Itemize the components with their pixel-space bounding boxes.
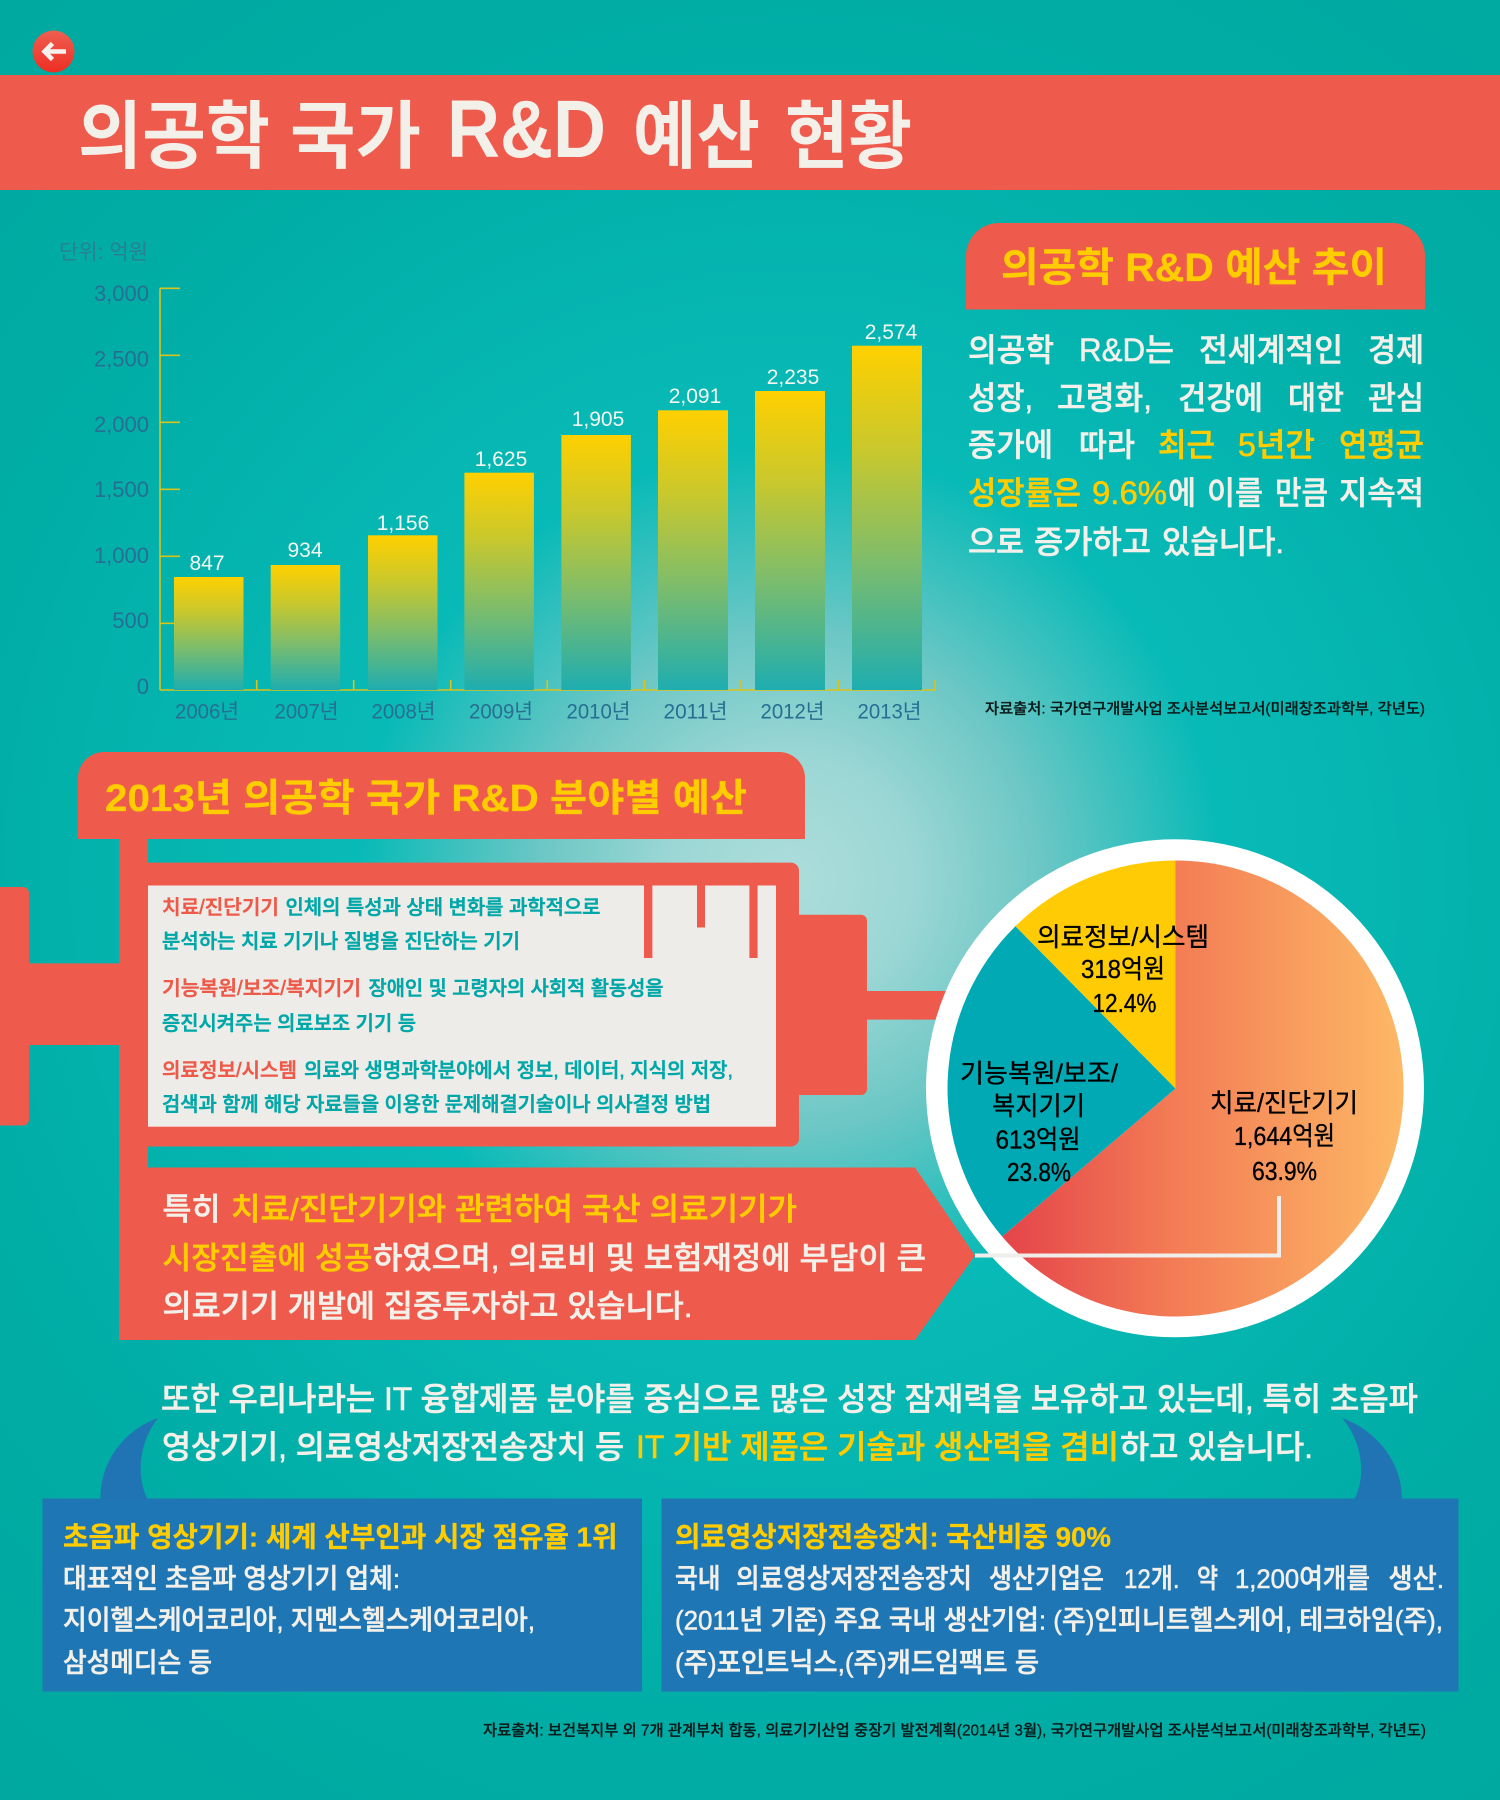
pie label: treatment and diagnostic devices: 63.9% xyxy=(1252,1156,1317,1186)
field definition text: 기능복원/보조/복지기기 xyxy=(162,977,361,1000)
text block: IT convergence xyxy=(161,1381,1418,1465)
storage devices body text: 국내 xyxy=(675,1564,720,1594)
connector line xyxy=(975,1196,1279,1256)
field definition text: 의료정보/시스템 xyxy=(162,1059,297,1082)
title text: R&D xyxy=(447,84,606,175)
source note: trend: 자료출처: 국가연구개발사업 조사분석보고서(미래창조과학부, 각년도) xyxy=(985,700,1425,718)
trend body text: 고령화, xyxy=(1057,380,1152,416)
x axis year labels: 2007년 xyxy=(274,700,338,724)
bar value labels: 1,156 xyxy=(377,512,429,535)
y axis labels: 2,500 xyxy=(94,346,149,372)
chart unit label: 단위: 억원 xyxy=(59,241,148,264)
callout: domestic devices: 시장진출에 성공 xyxy=(162,1241,372,1276)
trend body text: R&D는 xyxy=(1079,332,1174,368)
x axis year labels xyxy=(175,700,922,724)
right bracket xyxy=(1342,1418,1402,1500)
text block: IT convergence: IT 기반 제품은 기술과 생산력을 겸비 xyxy=(636,1429,1119,1465)
storage devices body text: (2011년 기준) 주요 국내 생산기업: (주)인피니트헬스케어, 테크하임(주), xyxy=(675,1606,1443,1636)
storage devices body text xyxy=(675,1564,1444,1678)
storage devices body text: 12개. xyxy=(1124,1564,1180,1594)
field definition text: 치료/진단기기 xyxy=(162,896,279,919)
trend body text: 경제 xyxy=(1368,332,1424,368)
field definition text: 인체의 특성과 상태 변화를 과학적으로 xyxy=(286,896,600,919)
x axis year labels: 2009년 xyxy=(469,700,533,724)
text block: IT convergence: 하고 있습니다. xyxy=(1120,1429,1313,1465)
pie label: rehabilitation devices: 23.8% xyxy=(1007,1157,1071,1187)
trend body text: 증가에 xyxy=(968,427,1053,463)
syringe stem xyxy=(119,838,148,1340)
panel: field definitions xyxy=(148,886,776,1127)
field definition text xyxy=(162,896,733,1116)
ultrasound body text: 대표적인 초음파 영상기기 업체: xyxy=(63,1564,400,1594)
panel: budget trend xyxy=(966,223,1425,718)
bar value labels: 1,905 xyxy=(572,408,624,431)
y axis labels: 3,000 xyxy=(94,281,149,306)
title text: 예산 xyxy=(633,95,760,178)
syringe needle xyxy=(866,991,946,1020)
storage devices body text: 1,200여개를 xyxy=(1235,1564,1370,1594)
left bracket xyxy=(100,1418,158,1500)
text block: IT convergence: 영상기기, 의료영상저장전송장치 등 xyxy=(162,1429,624,1465)
pie label: treatment and diagnostic devices xyxy=(1210,1088,1358,1186)
y axis labels: 1,500 xyxy=(94,477,149,502)
bar value labels: 2,574 xyxy=(865,321,918,344)
x axis year labels: 2011년 xyxy=(664,700,728,724)
panel: ultrasound devices xyxy=(42,1498,642,1692)
storage devices body text: 의료영상저장전송장치 xyxy=(736,1564,972,1594)
callout: domestic devices: 치료/진단기기와 관련하여 국산 의료기기가 xyxy=(231,1192,797,1227)
syringe plunger xyxy=(0,887,119,1126)
pie label: rehabilitation devices: 613억원 xyxy=(996,1124,1080,1154)
x axis year labels: 2006년 xyxy=(175,700,239,724)
field definition text: 의료와 생명과학분야에서 정보, 데이터, 지식의 저장, xyxy=(304,1059,733,1082)
syringe nozzle xyxy=(798,915,867,1095)
icon: back arrow button xyxy=(32,30,74,72)
pie label: treatment and diagnostic devices: 치료/진단기기 xyxy=(1210,1088,1358,1118)
trend body text: 관심 xyxy=(1368,380,1424,416)
trend body text: 대한 xyxy=(1288,380,1344,416)
pie label: medical information systems: 12.4% xyxy=(1092,988,1156,1018)
callout: domestic devices: 의료기기 개발에 집중투자하고 있습니다. xyxy=(162,1289,692,1324)
trend body text: 5년간 xyxy=(1238,427,1315,463)
panel: medical image storage devices xyxy=(662,1498,1458,1692)
trend body text: 건강에 xyxy=(1178,380,1263,416)
trend body text: 연평균 xyxy=(1339,427,1424,463)
x axis year labels: 2012년 xyxy=(760,700,824,724)
pie chart: budget by field xyxy=(926,839,1424,1337)
title text: 현황 xyxy=(785,95,912,178)
trend body text: 의공학 xyxy=(968,332,1054,368)
bars xyxy=(174,346,922,690)
bar chart: R&D budget 2006-2013 xyxy=(59,241,936,724)
pie label: medical information systems: 318억원 xyxy=(1081,954,1165,984)
trend body text: 따라 xyxy=(1079,427,1135,463)
bar value labels: 2,091 xyxy=(669,385,721,408)
ultrasound body text xyxy=(63,1564,535,1678)
bar value labels: 1,625 xyxy=(475,448,527,471)
title banner xyxy=(0,75,1500,190)
pie label: rehabilitation devices xyxy=(960,1058,1119,1187)
source note: bottom: 자료출처: 보건복지부 외 7개 관계부처 합동, 의료기기산업 중장기 발전계획(2014년 3월), 국가연구개발사업 조사분석보고서(미래창조과학부, 각년도) xyxy=(483,1722,1426,1740)
pie label: rehabilitation devices: 기능복원/보조/ xyxy=(960,1058,1119,1088)
y axis labels xyxy=(94,281,149,699)
y axis xyxy=(160,288,936,690)
trend body text: 있습니다. xyxy=(1162,524,1284,560)
title text: 의공학 xyxy=(78,95,270,178)
callout: domestic devices xyxy=(119,1168,975,1340)
trend body text: 전세계적인 xyxy=(1199,332,1343,368)
ultrasound heading: 초음파 영상기기: 세계 산부인과 시장 점유율 1위 xyxy=(63,1522,618,1552)
text block: IT convergence: 또한 우리나라는 IT 융합제품 분야를 중심으로 많은 성장 잠재력을 보유하고 있는데, 특히 초음파 xyxy=(161,1381,1418,1417)
trend body text: 성장, xyxy=(968,380,1033,416)
syringe barrel xyxy=(148,863,799,1146)
pie slice: rehabilitation devices xyxy=(948,926,1176,1236)
bar value labels: 2,235 xyxy=(767,366,819,389)
y axis labels: 500 xyxy=(112,608,149,633)
trend heading xyxy=(966,223,1425,310)
bar value labels: 847 xyxy=(189,552,225,575)
pie label: rehabilitation devices: 복지기기 xyxy=(992,1091,1085,1121)
title text xyxy=(78,84,912,178)
callout: domestic devices: 특히 xyxy=(162,1192,220,1227)
heading: field budget: 2013년 의공학 국가 R&D 분야별 예산 xyxy=(105,778,747,820)
trend body text xyxy=(968,332,1424,560)
storage devices heading: 의료영상저장전송장치: 국산비중 90% xyxy=(675,1522,1111,1552)
trend body text: 성장률은 xyxy=(968,475,1081,511)
ultrasound body text: 지이헬스케어코리아, 지멘스헬스케어코리아, xyxy=(63,1606,535,1636)
pie slice: medical information systems xyxy=(1015,860,1176,1088)
pie slice: treatment and diagnostic devices xyxy=(1002,860,1404,1317)
bar value labels xyxy=(189,321,918,575)
heading: field budget xyxy=(78,752,805,839)
trend body text: 9.6% xyxy=(1092,475,1167,511)
pie label: medical information systems: 의료정보/시스템 xyxy=(1037,922,1209,952)
y axis labels: 2,000 xyxy=(94,412,149,437)
pie label: medical information systems xyxy=(1037,922,1209,1018)
trend body text: 만큼 xyxy=(1275,475,1328,511)
trend body text: 증가하고 xyxy=(1034,524,1151,560)
pie label: treatment and diagnostic devices: 1,644억원 xyxy=(1234,1121,1335,1151)
field definition text: 검색과 함께 해당 자료들을 이용한 문제해결기술이나 의사결정 방법 xyxy=(162,1093,711,1116)
storage devices body text: 생산. xyxy=(1388,1564,1444,1594)
ultrasound body text: 삼성메디슨 등 xyxy=(63,1648,212,1678)
bar value labels: 934 xyxy=(287,539,323,562)
x axis year labels: 2013년 xyxy=(858,700,922,724)
storage devices body text: 약 xyxy=(1197,1564,1218,1594)
field definition text: 증진시켜주는 의료보조 기기 등 xyxy=(162,1012,416,1035)
y axis labels: 0 xyxy=(137,674,149,699)
trend body text: 최근 xyxy=(1158,427,1215,463)
callout: domestic devices: 하였으며, 의료비 및 보험재정에 부담이 큰 xyxy=(373,1241,926,1276)
trend body text: 이를 xyxy=(1207,475,1263,511)
trend body text: 으로 xyxy=(968,524,1024,560)
storage devices body text: 생산기업은 xyxy=(989,1564,1104,1594)
trend body text: 지속적 xyxy=(1339,475,1424,511)
field definition text: 장애인 및 고령자의 사회적 활동성을 xyxy=(368,977,664,1000)
storage devices body text: (주)포인트닉스,(주)캐드임팩트 등 xyxy=(675,1648,1039,1678)
x axis year labels: 2010년 xyxy=(566,700,630,724)
title text: 국가 xyxy=(290,95,421,178)
trend heading: 의공학 R&D 예산 추이 xyxy=(1001,246,1387,290)
field definition text: 분석하는 치료 기기나 질병을 진단하는 기기 xyxy=(162,930,520,953)
icon: syringe diagram xyxy=(0,838,946,1340)
x axis year labels: 2008년 xyxy=(372,700,436,724)
y axis labels: 1,000 xyxy=(94,543,149,568)
trend body text: 에 xyxy=(1168,475,1196,511)
